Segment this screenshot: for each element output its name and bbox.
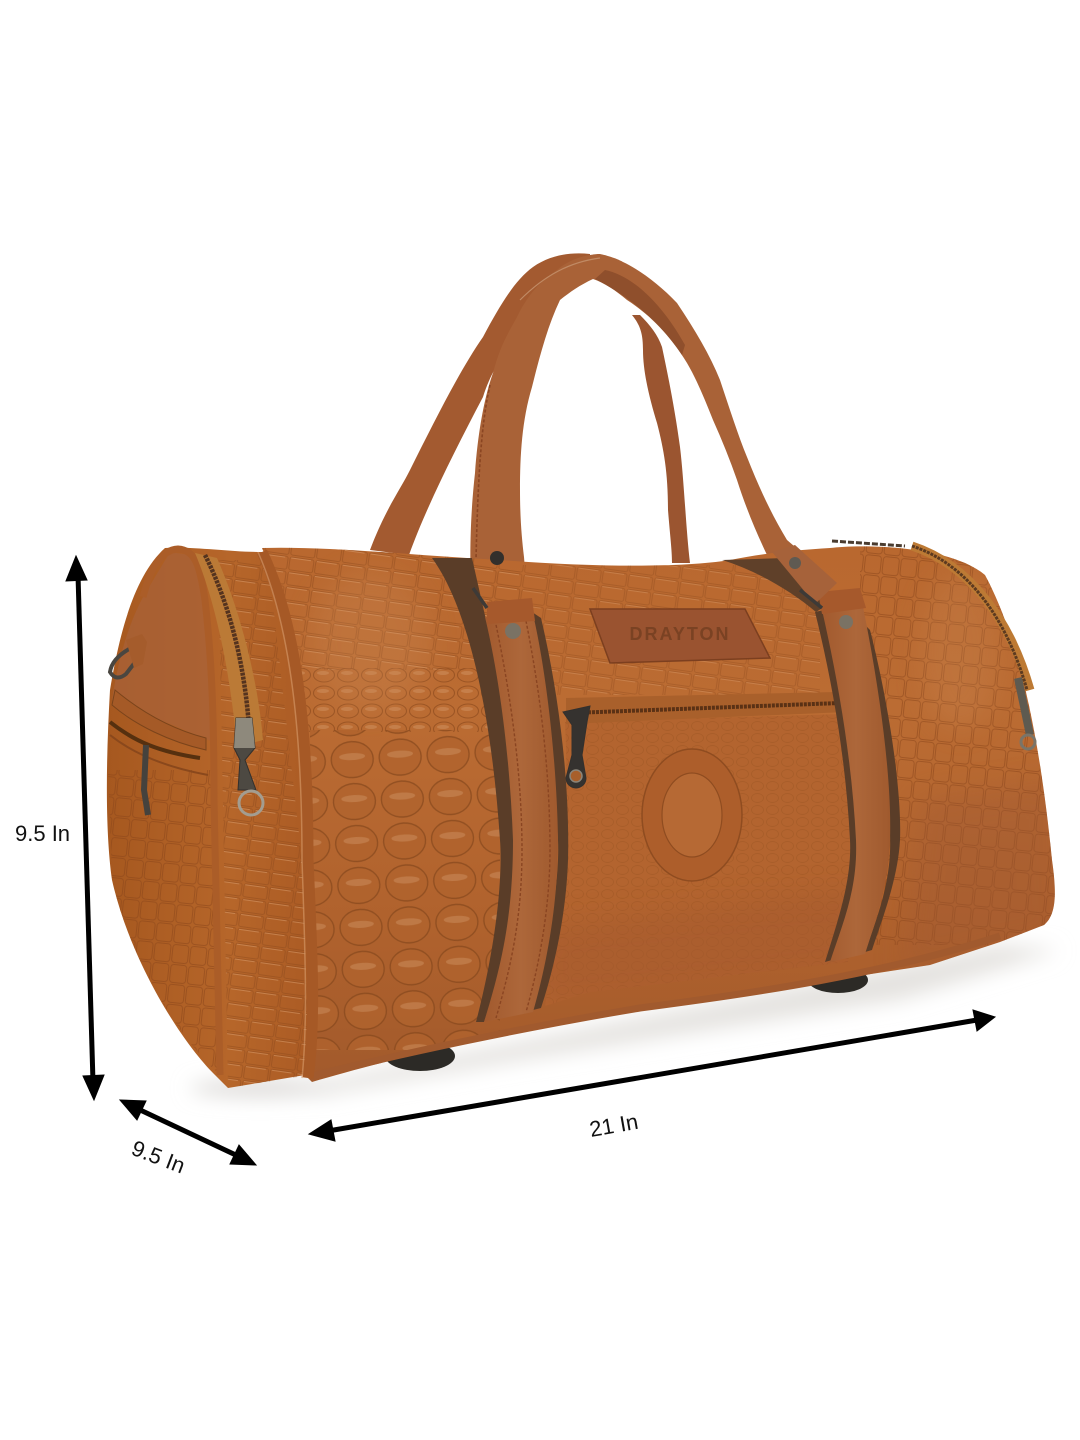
right tab xyxy=(818,588,866,614)
rivets xyxy=(490,551,504,565)
zip teeth xyxy=(205,555,250,745)
scale texture xyxy=(302,668,488,732)
pocket zipper xyxy=(566,692,846,724)
label: depth 9.5 In: 9.5 In xyxy=(128,1135,189,1178)
arrow: length xyxy=(309,1010,995,1141)
arrow: depth xyxy=(120,1100,256,1165)
right zipper pull xyxy=(1018,678,1030,735)
front left strap xyxy=(432,558,568,1022)
bag feet xyxy=(385,967,868,1071)
left tab xyxy=(487,598,535,624)
end piping xyxy=(143,549,220,1075)
handle tabs and rivets xyxy=(473,545,866,639)
right texture xyxy=(860,545,1060,945)
right zip xyxy=(912,546,1030,690)
strap leather xyxy=(484,614,558,1022)
texture between straps xyxy=(520,565,820,695)
bottom trim xyxy=(312,936,1000,1076)
side pocket flap xyxy=(112,690,206,750)
ground shadow xyxy=(190,945,1060,1096)
front right strap xyxy=(722,558,900,962)
center pocket panel xyxy=(559,692,850,957)
brand patch: DRAYTON xyxy=(629,624,731,644)
back handle xyxy=(370,253,690,563)
buckle rings xyxy=(473,588,487,608)
label: height 9.5 In: 9.5 In xyxy=(15,821,70,846)
zip tape xyxy=(195,553,263,747)
side zipper pull xyxy=(234,718,256,790)
front handle xyxy=(470,254,837,606)
infographic: duffel bag with dimensions xyxy=(16,253,1055,1174)
embossed medallion xyxy=(642,749,742,881)
upper grid texture xyxy=(260,540,520,670)
brand patch xyxy=(590,609,770,663)
D-ring xyxy=(110,648,143,678)
lower dark shade xyxy=(912,783,1055,968)
strap webbing xyxy=(432,558,514,1022)
main body xyxy=(258,540,1060,1082)
arrow: height xyxy=(66,556,104,1100)
strap webbing xyxy=(722,558,835,612)
handle underside shadow xyxy=(595,270,685,355)
side pocket pull xyxy=(144,745,148,815)
left end panel xyxy=(107,548,313,1088)
top zip pull xyxy=(832,541,905,546)
label: length 21 In: 21 In xyxy=(588,1109,640,1142)
light glare xyxy=(318,579,423,704)
pocket zipper pull xyxy=(563,706,590,788)
side seam piping xyxy=(262,552,313,1078)
end panel grain xyxy=(112,552,213,742)
zipper pulls xyxy=(110,634,1035,815)
strap leather xyxy=(822,602,890,962)
large dome texture xyxy=(310,730,500,1050)
